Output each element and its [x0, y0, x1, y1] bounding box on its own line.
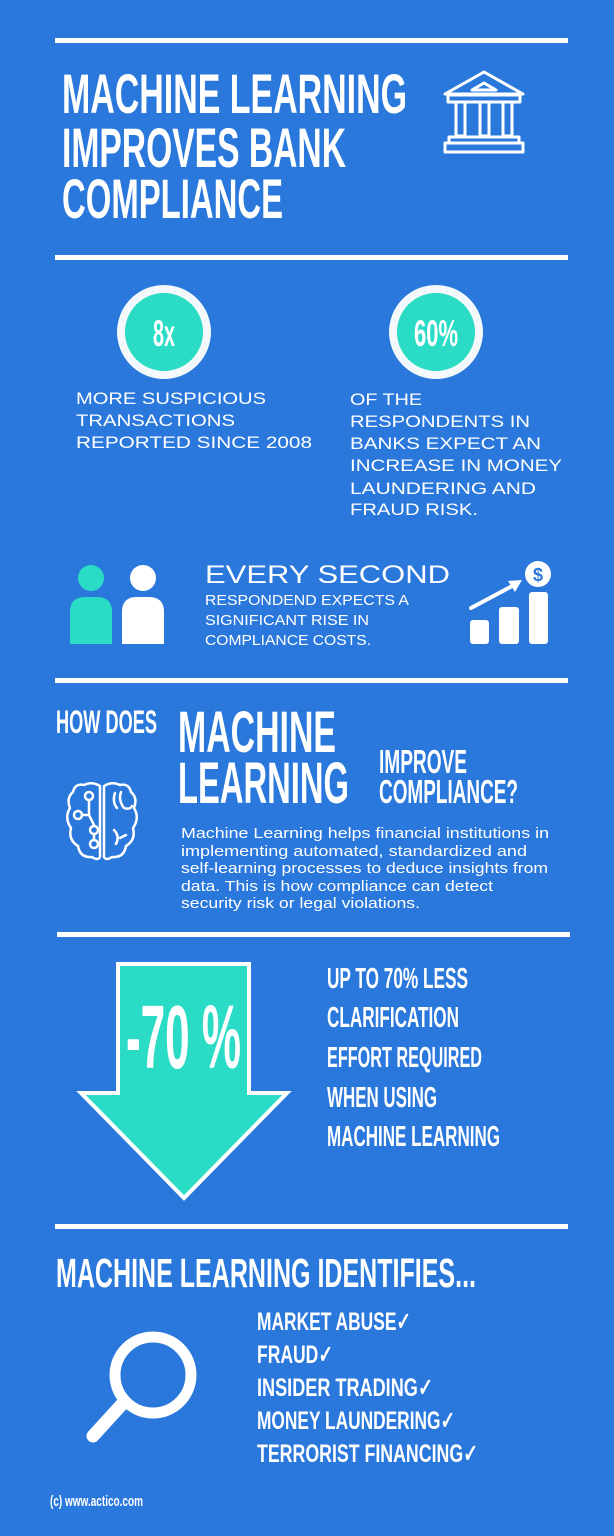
text block 60%: RESPONDENTS IN [350, 413, 530, 431]
text block 8x: TRANSACTIONS [76, 412, 235, 430]
stat: 8x [76, 289, 312, 452]
stat: 60% [350, 289, 562, 519]
icon: two people [70, 565, 164, 644]
text block 8x: REPORTED SINCE 2008 [76, 434, 312, 452]
heading: how does machine learning improve compliance: HOW DOES [56, 704, 157, 740]
paragraph [181, 825, 549, 912]
text block 60%: OF THE [350, 391, 422, 409]
text block 8x [76, 390, 312, 452]
circle badge 8x: 8x [153, 313, 175, 354]
text block: every second: COMPLIANCE COSTS. [205, 632, 371, 649]
arrow: -70%: -70 % [126, 988, 241, 1088]
checklist: MARKET ABUSE✓ [257, 1308, 411, 1336]
text block 60%: INCREASE IN MONEY [350, 457, 562, 475]
paragraph: Machine Learning helps financial institutions in [181, 825, 549, 842]
heading: how does machine learning improve compliance: IMPROVE [379, 743, 467, 780]
text block: every second: RESPONDEND EXPECTS A [205, 592, 409, 609]
circle badge 8x [121, 289, 207, 375]
heading: how does machine learning improve compliance: COMPLIANCE? [379, 773, 518, 810]
text block: 70% less effort [327, 963, 500, 1153]
text block 60% [350, 391, 562, 519]
text block: 70% less effort: WHEN USING [327, 1082, 437, 1114]
text block: every second [205, 561, 450, 649]
icon: bank [445, 72, 523, 152]
heading: how does machine learning improve compliance [56, 700, 518, 816]
text block 60%: FRAUD RISK. [350, 501, 478, 519]
icon: magnifier [93, 1337, 191, 1436]
paragraph: self-learning processes to deduce insights from [181, 860, 548, 877]
text block 60%: LAUNDERING AND [350, 480, 536, 498]
text block: 70% less effort: CLARIFICATION [327, 1002, 459, 1034]
icon: rising chart with dollar [470, 561, 551, 644]
icon: rising chart with dollar: $ [533, 565, 543, 585]
title: IMPROVES BANK [62, 116, 346, 179]
text block: 70% less effort: MACHINE LEARNING [327, 1121, 500, 1153]
paragraph: data. This is how compliance can detect [181, 878, 494, 895]
heading: how does machine learning improve compliance: MACHINE [178, 700, 336, 765]
paragraph: implementing automated, standardized and [181, 843, 527, 860]
title [62, 62, 407, 230]
heading: how does machine learning improve compliance: LEARNING [178, 751, 349, 816]
text block 8x: MORE SUSPICIOUS [76, 390, 266, 408]
checklist: INSIDER TRADING✓ [257, 1374, 433, 1402]
checklist [257, 1308, 478, 1468]
text block: every second: EVERY SECOND [205, 561, 450, 589]
footer: (c) www.actico.com [50, 1493, 143, 1510]
paragraph: security risk or legal violations. [181, 895, 420, 912]
checklist: TERRORIST FINANCING✓ [257, 1440, 478, 1468]
icon: brain [67, 783, 137, 859]
circle badge 60%: 60% [414, 313, 458, 354]
text block: every second: SIGNIFICANT RISE IN [205, 612, 369, 629]
circle badge 60% [393, 289, 479, 375]
text block: 70% less effort: EFFORT REQUIRED [327, 1042, 482, 1074]
checklist: MONEY LAUNDERING✓ [257, 1407, 455, 1435]
checklist: FRAUD✓ [257, 1341, 333, 1369]
text block 60%: BANKS EXPECT AN [350, 435, 541, 453]
text block: 70% less effort: UP TO 70% LESS [327, 963, 468, 995]
title: COMPLIANCE [62, 167, 283, 230]
arrow: -70% [81, 964, 287, 1198]
